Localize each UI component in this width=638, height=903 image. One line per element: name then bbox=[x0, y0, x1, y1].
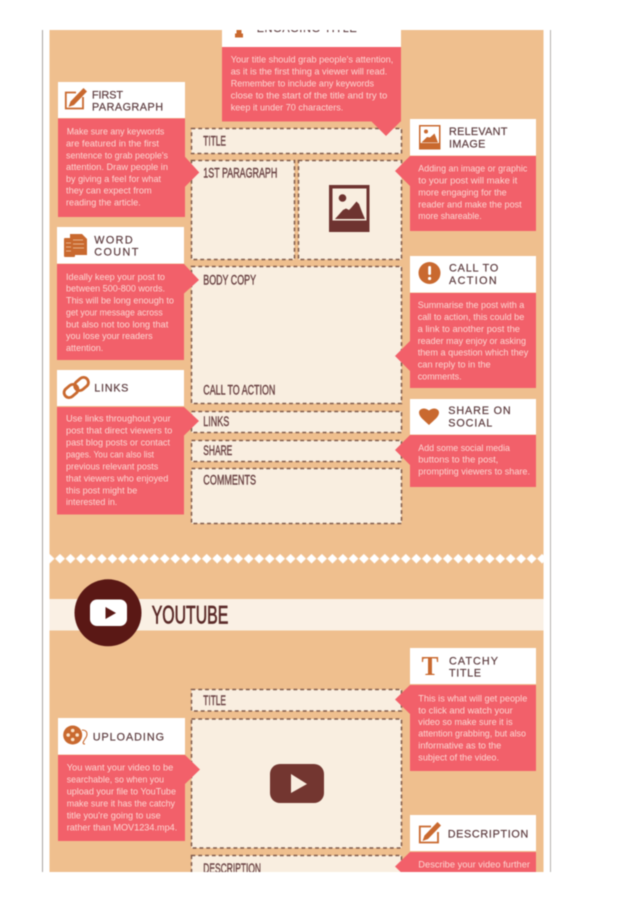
wireframe video title slot: TITLE bbox=[203, 693, 226, 708]
heading: DESCRIPTION bbox=[448, 828, 528, 840]
body text: interested in. bbox=[66, 497, 117, 507]
body text: This is what will get people bbox=[418, 693, 527, 703]
heading: SHARE ON bbox=[448, 405, 511, 417]
heading: IMAGE bbox=[449, 139, 485, 151]
divider: diamond strip bbox=[50, 554, 544, 564]
body text: buttons to the post, bbox=[418, 455, 498, 465]
body text: rather than MOV1234.mp4. bbox=[67, 822, 177, 832]
card: catchy title bbox=[395, 648, 536, 771]
arrow bbox=[185, 755, 200, 784]
body text: between 500-800 words. bbox=[66, 284, 165, 294]
body text bbox=[418, 693, 527, 762]
body text: pages. You can also list bbox=[66, 450, 154, 460]
body text: that viewers who enjoyed bbox=[66, 473, 168, 483]
body text: This will be long enough to bbox=[66, 295, 174, 305]
tan page panel bbox=[50, 30, 544, 872]
card: call to action bbox=[395, 256, 536, 388]
panel: youtube wireframe bbox=[192, 690, 402, 896]
body text: make sure it has the catchy bbox=[67, 799, 175, 809]
icon: image bbox=[419, 125, 440, 150]
body text: close to the start of the title and try to bbox=[231, 90, 387, 100]
icon: image placeholder bbox=[329, 185, 370, 232]
body text: prompting viewers to share. bbox=[418, 467, 530, 477]
heading: TITLE bbox=[449, 668, 481, 680]
body text bbox=[66, 126, 168, 208]
wireframe share slot bbox=[192, 440, 402, 462]
body text: upload your file to YouTube bbox=[67, 787, 176, 797]
body text: attention grabbing, but also bbox=[418, 729, 526, 739]
body text bbox=[66, 414, 172, 507]
body text: searchable, so when you bbox=[67, 775, 164, 785]
heading: CATCHY bbox=[449, 655, 498, 667]
title: YOUTUBE bbox=[152, 601, 228, 629]
body text: to click and watch your bbox=[418, 705, 513, 715]
wireframe body copy slot: BODY COPY bbox=[203, 272, 256, 287]
body text: Add some social media bbox=[418, 443, 511, 453]
wireframe description slot bbox=[192, 856, 402, 896]
body text: more engaging for the bbox=[418, 187, 507, 197]
body text: Summarise the post with a bbox=[418, 300, 525, 310]
icon: documents bbox=[64, 234, 87, 257]
body text: can reply to in the bbox=[418, 360, 491, 370]
wireframe image slot bbox=[298, 160, 402, 260]
body text bbox=[418, 164, 528, 221]
heading bbox=[449, 263, 498, 287]
body text: comments. bbox=[418, 371, 462, 381]
arrow bbox=[395, 156, 410, 186]
icon: exclamation circle bbox=[418, 262, 440, 284]
icon: film reel bbox=[63, 726, 87, 744]
wireframe links slot: LINKS bbox=[203, 414, 229, 429]
icon: serif T: T bbox=[422, 651, 438, 681]
body text: you lose your readers bbox=[66, 331, 153, 341]
body text bbox=[418, 300, 529, 381]
body text: keep it under 70 characters. bbox=[231, 102, 343, 112]
wireframe video slot bbox=[192, 719, 402, 848]
body text bbox=[67, 763, 177, 832]
body text bbox=[418, 443, 530, 477]
body text: get your message across bbox=[66, 307, 163, 317]
wireframe comments slot: COMMENTS bbox=[203, 472, 256, 487]
wireframe comments slot bbox=[192, 468, 402, 524]
body text: they can expect from bbox=[66, 186, 152, 196]
body text: reader may enjoy or asking bbox=[418, 336, 526, 346]
body text: sentence to grab people's bbox=[66, 150, 168, 160]
heading: ENGAGING TITLE bbox=[257, 23, 357, 35]
icon: edit pencil bbox=[420, 822, 441, 842]
icon: heart bbox=[419, 408, 439, 425]
body text: subject of the video. bbox=[418, 752, 499, 762]
body text: call to action, this could be bbox=[418, 312, 524, 322]
body text: more shareable. bbox=[418, 211, 482, 221]
card: word count bbox=[57, 227, 199, 360]
icon: title T bbox=[235, 28, 243, 38]
wireframe links slot bbox=[192, 412, 402, 432]
body text: by giving a feel for what bbox=[66, 174, 161, 184]
body text: Describe your video further bbox=[418, 859, 530, 869]
heading: ACTION bbox=[449, 275, 497, 287]
body text: informative as to the bbox=[418, 741, 501, 751]
body text: them a question which they bbox=[418, 348, 529, 358]
card: engaging title bbox=[222, 20, 401, 136]
body text: attention. Draw people in bbox=[66, 162, 168, 172]
wireframe first paragraph slot: 1ST PARAGRAPH bbox=[203, 166, 277, 181]
arrow bbox=[395, 685, 410, 714]
body text: You want your video to be bbox=[67, 763, 173, 773]
wireframe body copy slot bbox=[192, 266, 402, 404]
card: description bbox=[395, 815, 536, 882]
wireframe video title slot bbox=[192, 690, 402, 711]
body text: Use links throughout your bbox=[66, 414, 171, 424]
card: uploading bbox=[58, 718, 200, 841]
wireframe first paragraph slot bbox=[192, 160, 294, 260]
body text: Remember to include any keywords bbox=[231, 79, 374, 89]
arrow bbox=[395, 435, 410, 465]
card: first paragraph bbox=[58, 82, 199, 217]
heading bbox=[92, 89, 163, 113]
card: share on social bbox=[395, 399, 536, 487]
heading: UPLOADING bbox=[93, 731, 164, 743]
banner: youtube heading bbox=[50, 579, 544, 646]
arrow bbox=[184, 407, 199, 436]
heading: RELEVANT bbox=[449, 126, 508, 138]
body text: past blog posts or contact bbox=[66, 438, 170, 448]
body text: a link to another post the bbox=[418, 324, 520, 334]
body text: previous relevant posts bbox=[66, 461, 159, 471]
wireframe title slot bbox=[192, 128, 402, 154]
body text: this post might be bbox=[66, 485, 137, 495]
heading bbox=[449, 655, 498, 680]
body text: to your post will make it bbox=[418, 175, 518, 185]
body text: are featured in the first bbox=[66, 138, 159, 148]
heading: WORD bbox=[94, 234, 133, 246]
card: links bbox=[57, 370, 199, 514]
heading: CALL TO bbox=[449, 263, 498, 275]
icon: chain link bbox=[62, 375, 90, 400]
wireframe body copy slot: CALL TO ACTION bbox=[203, 382, 275, 397]
arrow bbox=[184, 264, 199, 294]
arrow bbox=[185, 157, 199, 187]
body text: Your title should grab people's attention, bbox=[231, 55, 393, 65]
body text: as it is the first thing a viewer will read. bbox=[231, 67, 387, 77]
body text: reader and make the post bbox=[418, 199, 522, 209]
body text: Adding an image or graphic bbox=[418, 164, 528, 174]
icon: edit pencil bbox=[66, 88, 87, 108]
body text: reading the article. bbox=[66, 198, 141, 208]
body text bbox=[231, 55, 393, 112]
arrow bbox=[395, 852, 410, 881]
icon: play button bbox=[270, 764, 324, 803]
heading: FIRST bbox=[92, 89, 123, 101]
wireframe description slot: DESCRIPTION bbox=[203, 861, 261, 876]
wireframe title slot: TITLE bbox=[203, 134, 226, 149]
wireframe share slot: SHARE bbox=[203, 443, 232, 458]
heading: PARAGRAPH bbox=[92, 101, 163, 113]
body text: but also not too long that bbox=[66, 319, 169, 329]
arrow bbox=[395, 341, 410, 371]
heading: SOCIAL bbox=[448, 418, 492, 430]
body text: title you're going to use bbox=[67, 811, 161, 821]
body text: post that direct viewers to bbox=[66, 426, 172, 436]
heading bbox=[449, 126, 508, 151]
heading bbox=[448, 405, 511, 430]
body text: Make sure any keywords bbox=[67, 126, 165, 136]
card: relevant image bbox=[395, 119, 536, 231]
heading bbox=[94, 234, 139, 259]
heading: LINKS bbox=[94, 383, 128, 395]
heading: COUNT bbox=[94, 247, 139, 259]
arrow bbox=[371, 121, 401, 136]
body text: Ideally keep your post to bbox=[66, 272, 165, 282]
body text: attention. bbox=[66, 343, 103, 353]
body text bbox=[66, 272, 174, 353]
body text: video so make sure it is bbox=[418, 717, 513, 727]
panel: blog post wireframe bbox=[192, 128, 402, 524]
icon: youtube play badge bbox=[74, 579, 142, 646]
